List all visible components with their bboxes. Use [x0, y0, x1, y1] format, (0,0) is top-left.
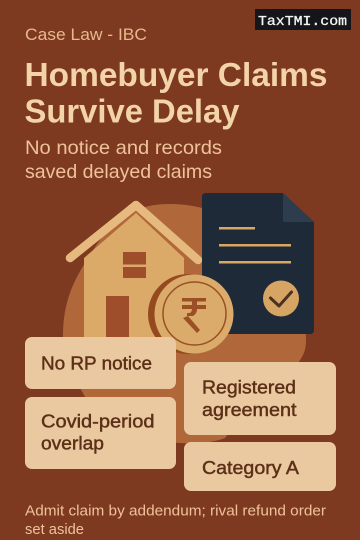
card: no RP notice: No RP notice [41, 352, 152, 374]
footer note: set aside [25, 521, 84, 538]
title: Homebuyer Claims [24, 56, 327, 93]
icon: house [70, 205, 198, 340]
card: covid-period overlap: overlap [41, 432, 104, 454]
card: category A: Category A [202, 457, 300, 478]
background blob [63, 204, 306, 443]
footer note [25, 502, 326, 538]
logo badge: TaxTMI.com [258, 14, 347, 30]
card: registered agreement: agreement [202, 399, 296, 420]
subtitle [25, 137, 222, 183]
title: Survive Delay [24, 92, 240, 130]
footer note: Admit claim by addendum; rival refund order [25, 502, 326, 520]
card: covid-period overlap: Covid-period [41, 410, 154, 432]
eyebrow: Case Law - IBC [25, 26, 147, 44]
logo badge [255, 9, 351, 30]
subtitle: saved delayed claims [25, 161, 212, 183]
card: category A [184, 442, 336, 491]
title [24, 56, 327, 130]
card: no RP notice [25, 337, 176, 389]
icon: document [202, 193, 314, 334]
subtitle: No notice and records [25, 137, 222, 159]
card: registered agreement: Registered [202, 376, 296, 398]
card: registered agreement [184, 362, 336, 435]
icon: rupee coin [148, 274, 234, 354]
card: covid-period overlap [25, 397, 176, 469]
